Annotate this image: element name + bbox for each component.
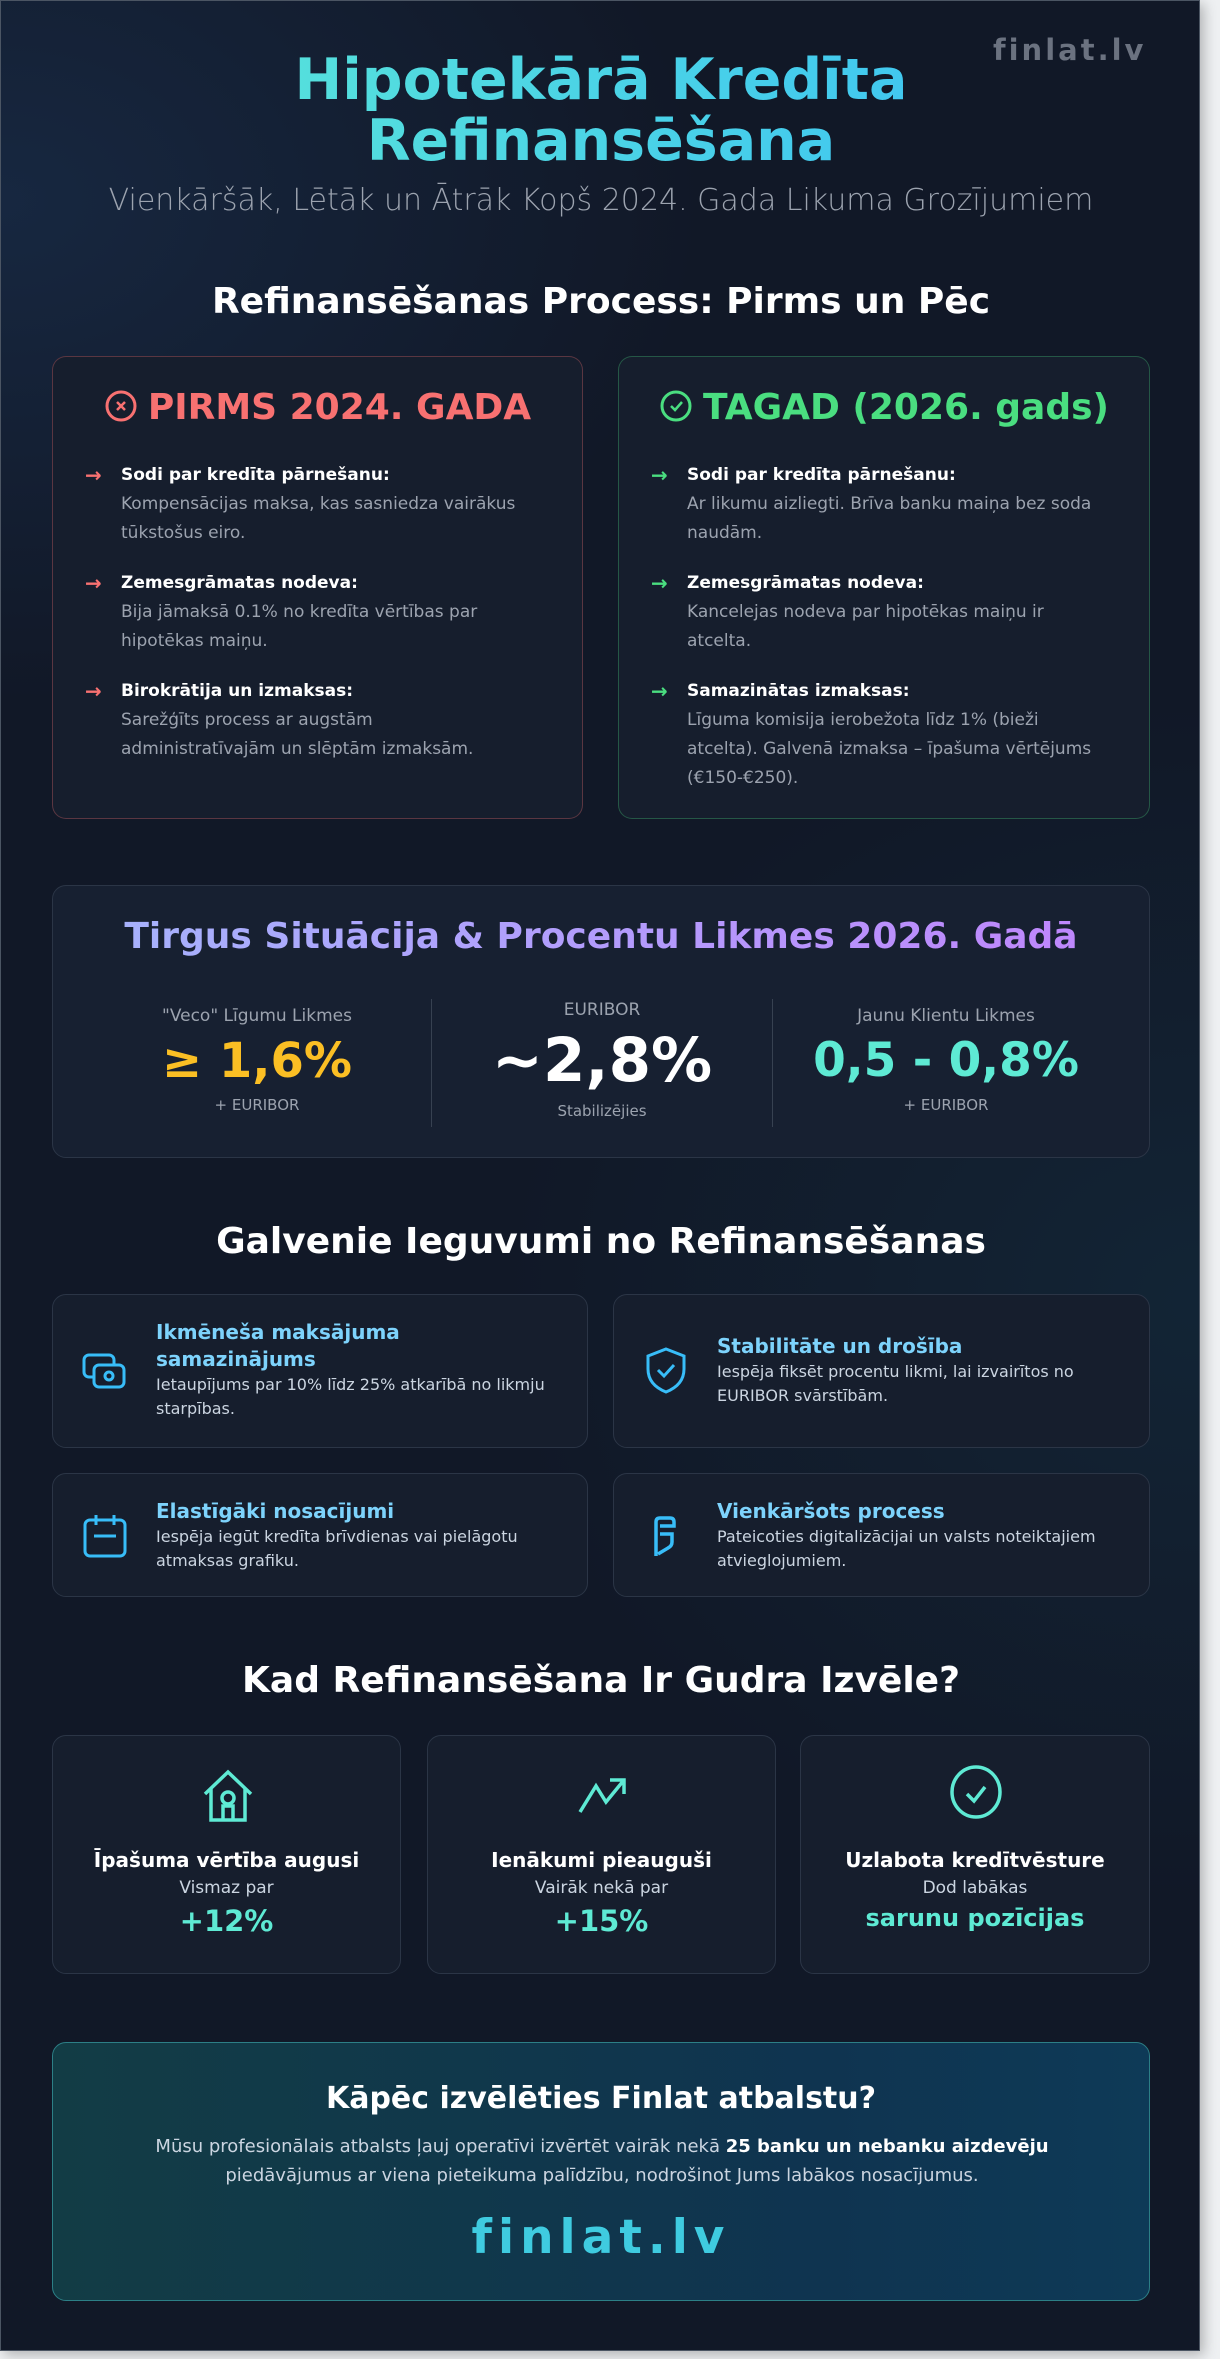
panel: now: →: [651, 679, 668, 703]
item 2: [85, 571, 478, 651]
stat: new clients: + EURIBOR: [904, 1096, 988, 1114]
item 3: [85, 679, 473, 759]
icon: shield: [646, 1347, 686, 1394]
panel: before: Bija jāmaksā 0.1% no kredīta vērtības par: [121, 602, 477, 622]
benefit: simplified process: Pateicoties digitalizācijai un valsts noteiktajiem atvieglojumiem.: [717, 1527, 1096, 1570]
title: Hipotekārā Kredīta: [295, 47, 907, 113]
callout text: Mūsu profesionālais atbalsts ļauj operatīvi izvērtēt vairāk nekā 25 banku un nebanku aizdevēju piedāvājumus ar viena pieteikuma palīdzību, nodrošinot Jums labākos nosacījumus.: [155, 2136, 1049, 2186]
icon: check circle: [950, 1765, 1002, 1819]
stat: euribor: Stabilizējies: [557, 1102, 647, 1120]
stat: old rates: [162, 1006, 352, 1114]
benefit: stability: Iespēja fiksēt procentu likmi, lai izvairītos no EURIBOR svārstībām.: [717, 1362, 1074, 1405]
panel: now: →: [651, 571, 668, 595]
panel: before: Kompensācijas maksa, kas sasniedza vairākus: [121, 494, 515, 514]
panel: now: Samazinātas izmaksas:: [687, 681, 910, 701]
panel: now: naudām.: [687, 523, 762, 543]
panel: before: Sarežģīts process ar augstām: [121, 710, 373, 730]
card: income: [427, 1735, 776, 1974]
callout heading: Kāpēc izvēlēties Finlat atbalstu?: [326, 2081, 876, 2116]
title: [1, 50, 1201, 172]
panel: before: hipotēkas maiņu.: [121, 631, 268, 651]
icon: calendar: [84, 1515, 126, 1558]
card: credit history: Uzlabota kredītvēsture: [845, 1848, 1105, 1872]
panel: before: →: [85, 571, 102, 595]
panel: before: Zemesgrāmatas nodeva:: [121, 573, 358, 593]
heading: market: Tirgus Situācija & Procentu Likmes 2026. Gadā: [124, 916, 1078, 957]
panel: before: administratīvajām un slēptām izmaksām.: [121, 739, 473, 759]
icon: trend up: [578, 1778, 626, 1813]
stat: euribor: ~2,8%: [492, 1025, 712, 1096]
stat: old rates: "Veco" Līgumu Likmes: [162, 1006, 352, 1026]
heading: benefits: Galvenie Ieguvumi no Refinansēšanas: [216, 1221, 986, 1262]
panel: now: atcelta). Galvenā izmaksa – īpašuma vērtējums: [687, 739, 1091, 759]
benefit: stability: [613, 1294, 1150, 1448]
card: income: Vairāk nekā par: [535, 1878, 668, 1898]
panel: market: [52, 885, 1150, 1158]
heading: process: Refinansēšanas Process: Pirms un Pēc: [212, 281, 990, 322]
stat: new clients: 0,5 - 0,8%: [813, 1033, 1079, 1088]
heading: before: PIRMS 2024. GADA: [148, 387, 531, 428]
card: property value: [52, 1735, 401, 1974]
panel: before: Sodi par kredīta pārnešanu:: [121, 465, 390, 485]
heading: when: Kad Refinansēšana Ir Gudra Izvēle?: [242, 1660, 960, 1701]
title: Refinansēšana: [367, 108, 835, 174]
heading: now: TAGAD (2026. gads): [703, 387, 1109, 428]
card: income: +15%: [555, 1904, 648, 1938]
panel: before: tūkstošus eiro.: [121, 523, 245, 543]
panel: before: Birokrātija un izmaksas:: [121, 681, 353, 701]
panel: now: Sodi par kredīta pārnešanu:: [687, 465, 956, 485]
card: property value: Vismaz par: [179, 1878, 274, 1898]
icon: process: [654, 1516, 676, 1556]
panel: now: →: [651, 463, 668, 487]
stat: old rates: + EURIBOR: [215, 1096, 299, 1114]
panel: before: →: [85, 463, 102, 487]
benefit: flexible terms: [52, 1473, 588, 1597]
stat: euribor: EURIBOR: [564, 1000, 640, 1020]
panel: before: →: [85, 679, 102, 703]
panel: now: atcelta.: [687, 631, 751, 651]
card: property value: Īpašuma vērtība augusi: [94, 1848, 359, 1872]
subtitle: Vienkāršāk, Lētāk un Ātrāk Kopš 2024. Gada Likuma Grozījumiem: [109, 183, 1093, 218]
panel: now: [618, 356, 1150, 819]
stat: new clients: [813, 1006, 1079, 1114]
stat: old rates: ≥ 1,6%: [162, 1033, 352, 1089]
benefit: monthly payment: Ietaupījums par 10% līdz 25% atkarībā no likmju starpības.: [156, 1375, 545, 1418]
benefit: simplified process: Vienkāršots process: [717, 1499, 945, 1523]
benefit: monthly payment: Ikmēneša maksājuma samazinājums: [156, 1320, 400, 1371]
stat: euribor: [492, 1000, 712, 1120]
item 2: [651, 571, 1044, 651]
stat: new clients: Jaunu Klientu Likmes: [857, 1006, 1035, 1026]
item 3: [651, 679, 1091, 788]
benefit: simplified process: [613, 1473, 1150, 1597]
benefit: flexible terms: Elastīgāki nosacījumi: [156, 1499, 394, 1523]
panel: now: (€150-€250).: [687, 768, 798, 788]
card: credit history: Dod labākas: [923, 1878, 1027, 1898]
icon: money: [82, 1354, 126, 1388]
brand logo: finlat.lv: [472, 2210, 730, 2265]
item 1: [651, 463, 1091, 543]
callout: finlat support: [52, 2042, 1150, 2301]
card: credit history: sarunu pozīcijas: [866, 1904, 1084, 1932]
card: income: Ienākumi pieauguši: [491, 1848, 712, 1872]
panel: now: Ar likumu aizliegti. Brīva banku maiņa bez soda: [687, 494, 1091, 514]
icon: house: [204, 1770, 252, 1822]
panel: now: Līguma komisija ierobežota līdz 1% (bieži: [687, 710, 1039, 730]
benefit: flexible terms: Iespēja iegūt kredīta brīvdienas vai pielāgotu atmaksas grafiku.: [156, 1527, 518, 1570]
panel: now: Kancelejas nodeva par hipotēkas maiņu ir: [687, 602, 1044, 622]
panel: now: Zemesgrāmatas nodeva:: [687, 573, 924, 593]
benefit: stability: Stabilitāte un drošība: [717, 1334, 962, 1358]
brand watermark: finlat.lv: [993, 33, 1146, 67]
item 1: [85, 463, 515, 543]
card: property value: +12%: [180, 1904, 273, 1938]
card: credit history: [800, 1735, 1150, 1974]
benefit: monthly payment: [52, 1294, 588, 1448]
panel: before: [52, 356, 583, 819]
